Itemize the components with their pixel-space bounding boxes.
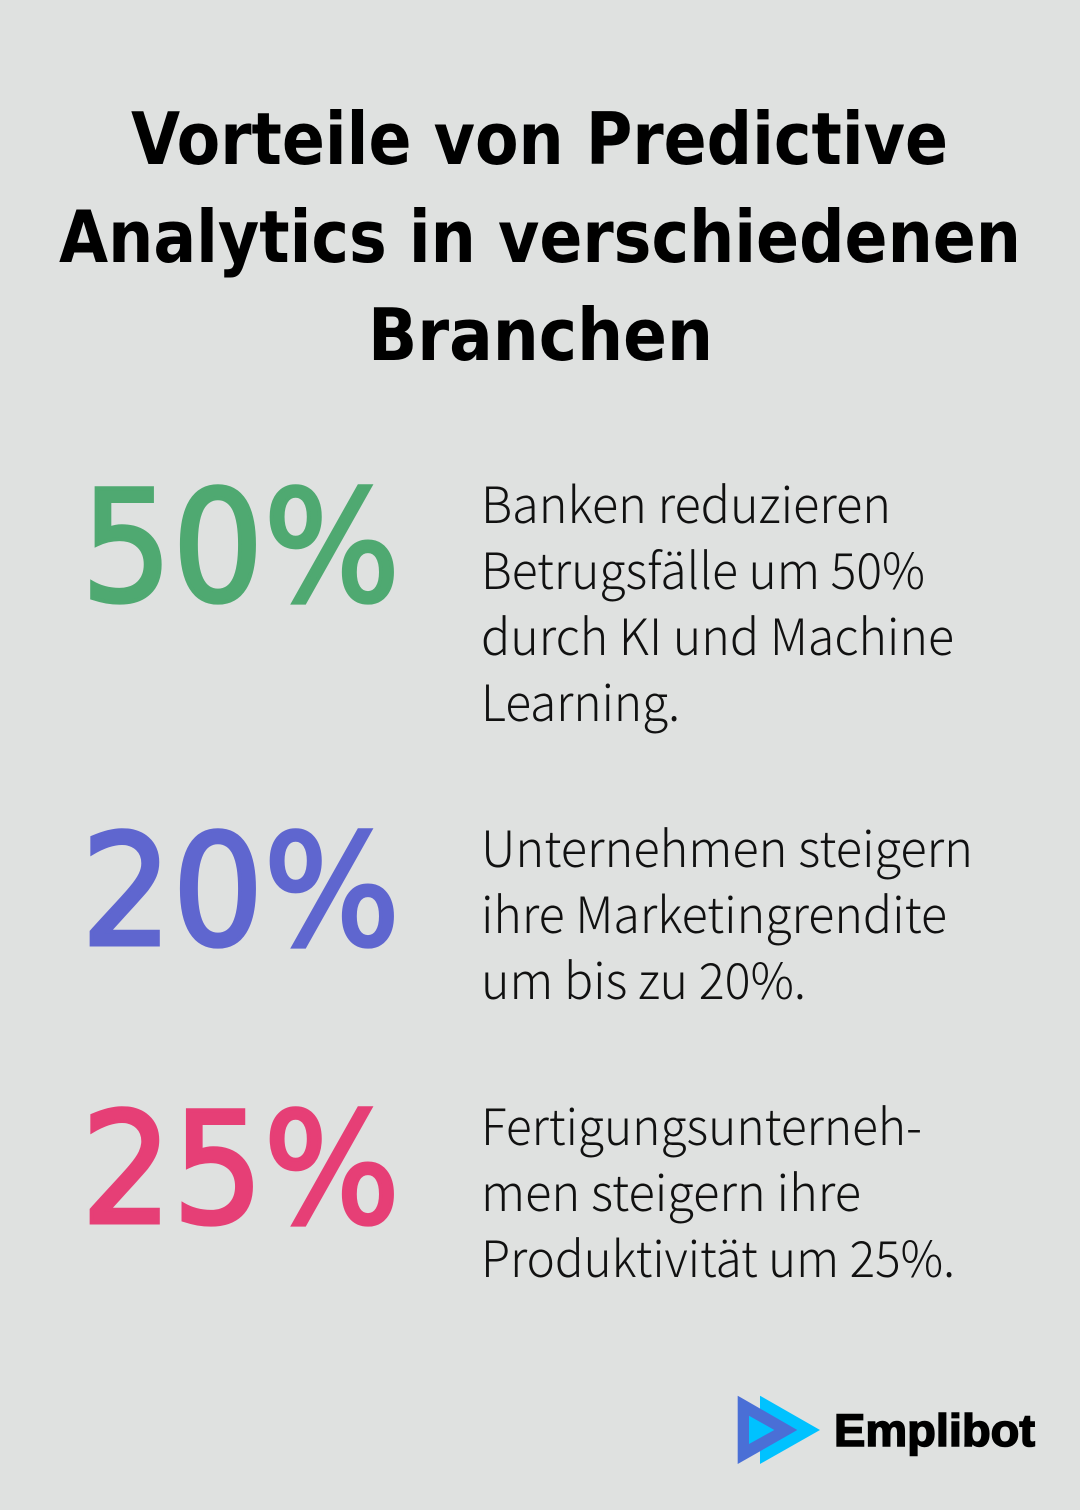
text: manufacturing: Fertigungsunterneh- <box>481 1088 922 1160</box>
text: banks: durch KI und Machine <box>481 598 954 670</box>
wordmark: Emplibot <box>834 1405 1035 1456</box>
statistic: 50%: 50% <box>81 458 400 638</box>
text: banks: Learning. <box>481 664 680 736</box>
logo: Emplibot <box>738 1396 1035 1464</box>
title <box>59 97 1021 377</box>
text: marketing: ihre Marketingrendite <box>481 876 947 948</box>
text: banks: Banken reduzieren <box>481 466 891 538</box>
text: banks: Betrugsfälle um 50% <box>481 532 925 604</box>
statistic: 25%: 25% <box>81 1080 400 1260</box>
text: marketing <box>481 810 973 1014</box>
text: manufacturing: men steigern ihre <box>481 1154 861 1226</box>
title: Branchen <box>368 293 713 377</box>
statistic: 20%: 20% <box>81 802 400 982</box>
title: Vorteile von Predictive <box>131 97 948 181</box>
text: marketing: um bis zu 20%. <box>481 942 806 1014</box>
text: manufacturing <box>481 1088 955 1292</box>
text: marketing: Unternehmen steigern <box>481 810 973 882</box>
text: banks <box>481 466 954 736</box>
text: manufacturing: Produktivität um 25%. <box>481 1220 955 1292</box>
icon: play triangles <box>738 1396 820 1464</box>
